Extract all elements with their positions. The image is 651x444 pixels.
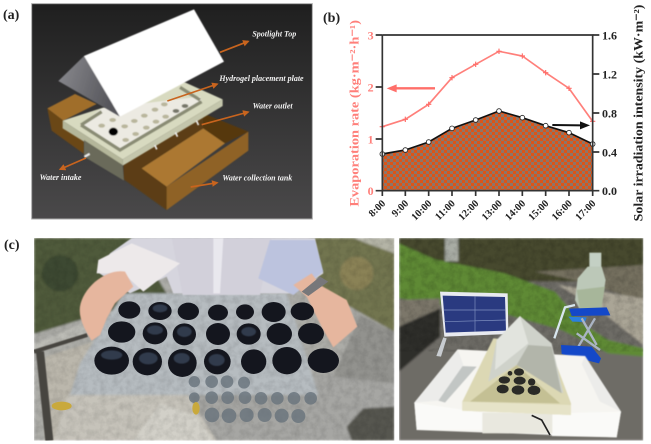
foliage texture [399,238,643,351]
arrow: right axis [552,121,590,129]
granite and foliage texture [34,238,394,441]
hydrogel discs in device [497,368,540,395]
callout labels: Water outlet [253,101,293,110]
hands [80,271,357,347]
time axis labels: 14:00 [503,198,528,223]
solar irradiation markers [380,109,595,156]
water collection tank [47,94,248,210]
left axis numbers: 0 [368,184,374,198]
background scenery [399,238,643,441]
water bottle [575,253,606,310]
left axis numbers: 3 [368,28,374,42]
time axis labels: 12:00 [457,198,481,223]
left axis numbers [368,28,374,198]
blue lab stand [561,307,610,363]
right axis numbers: 0.8 [602,106,617,120]
right axis numbers: 1.6 [602,28,617,42]
callout labels: Spotlight Top [252,29,296,38]
evaporation rate line [382,51,593,127]
right axis title: Solar irradiation intensity (kW·m⁻²) [632,5,646,221]
white shirt [97,238,323,295]
disc highlights [101,304,256,366]
wristband [302,277,328,296]
panel: device schematic [32,4,312,219]
time axis labels: 17:00 [574,198,598,223]
callout labels: Hydrogel placement plate [218,74,304,83]
time axis labels: 13:00 [480,198,505,223]
right axis numbers: 1.2 [602,67,617,81]
photo: hands holding hydrogel plate [34,238,394,441]
solar irradiation area [382,111,593,191]
spotlight top [58,9,224,117]
evaporator with tent [462,316,571,415]
panel: line chart [347,5,646,223]
callout labels: Water collection tank [222,173,292,182]
hydrogel placement plate [63,82,223,181]
time axis labels: 10:00 [410,198,434,223]
right axis numbers [602,28,617,198]
solar panel [436,292,508,357]
callout labels [40,29,304,182]
disc shadows on ground [189,375,317,423]
left axis title: Evaporation rate (kg·m⁻²·h⁻¹) [347,20,361,207]
tube [554,305,575,338]
photo: outdoor device setup [399,238,643,441]
time axis labels [367,198,598,223]
fallen leaves [52,402,200,415]
hydrogel discs [94,301,339,377]
solar irradiation line [382,111,593,154]
time axis labels: 11:00 [433,198,458,223]
dark background [32,4,312,219]
white collection tank [414,349,621,437]
label (b): (b) [323,11,340,26]
axes [376,35,599,196]
time axis labels: 15:00 [527,198,551,223]
cable [532,415,550,435]
ground and vegetation [34,238,394,441]
left axis numbers: 2 [368,80,374,94]
right axis numbers: 0.4 [602,145,617,159]
callout arrows [60,41,248,187]
label (c): (c) [4,238,20,253]
callout labels: Water intake [40,173,82,182]
evaporation rate markers [380,49,595,129]
label (a): (a) [3,8,20,23]
time axis labels: 9:00 [390,198,411,220]
right axis numbers: 0.0 [602,184,617,198]
time axis labels: 16:00 [550,198,575,223]
stone frame [34,335,87,441]
arrow: left axis [387,84,435,92]
time axis labels: 8:00 [367,198,388,220]
left axis numbers: 1 [368,132,374,146]
